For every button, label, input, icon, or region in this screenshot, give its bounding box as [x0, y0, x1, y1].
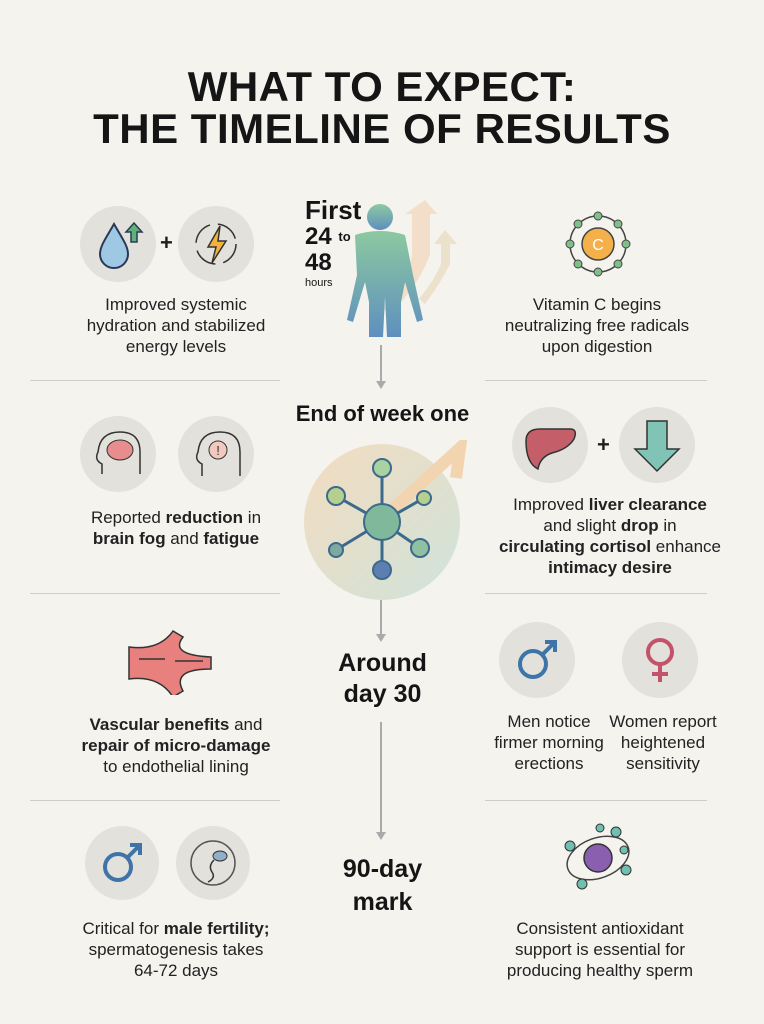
text: liver: Improved liver clearance — [513, 495, 707, 514]
heading: 90-day mark: 90-day — [343, 855, 422, 883]
text: antioxidant — [507, 919, 693, 980]
arrow 3 — [376, 722, 386, 840]
text: hydration: Improved systemic — [105, 295, 247, 314]
heading: first 24 to 48 hours: 48 — [305, 249, 332, 276]
text: liver: circulating cortisol enhance — [499, 537, 721, 556]
icon: energy — [178, 206, 254, 282]
arrow 2 — [376, 600, 386, 642]
text: men — [494, 712, 604, 773]
text: vascular: Vascular benefits and — [90, 715, 262, 734]
text: women — [609, 712, 717, 773]
text: vitamin C: neutralizing free radicals — [505, 316, 689, 335]
text: vitamin C: upon digestion — [542, 337, 652, 356]
text: brain fog: brain fog and fatigue — [93, 529, 259, 548]
icon: head alert — [178, 416, 254, 492]
icon: vitamin C: C — [592, 237, 604, 254]
text: fertility — [82, 919, 270, 980]
heading: 90-day mark — [343, 855, 422, 916]
text: vitamin C — [505, 295, 689, 356]
text: brain fog — [91, 508, 261, 548]
text: liver — [499, 495, 721, 577]
icon: down arrow — [619, 407, 695, 483]
icon: brain — [80, 416, 156, 492]
text: brain fog: Reported reduction in — [91, 508, 261, 527]
heading: first 24 to 48 hours: First — [305, 195, 361, 225]
icon: blood vessel — [128, 630, 212, 695]
text: liver: intimacy desire — [548, 558, 672, 577]
text: fertility: 64-72 days — [134, 961, 218, 980]
plus: + — [160, 230, 173, 255]
text: hydration — [87, 295, 265, 356]
icon: head alert: ! — [216, 443, 220, 458]
text: vitamin C: Vitamin C begins — [533, 295, 661, 314]
arrow 1 — [376, 345, 386, 389]
heading: around day 30 — [338, 649, 427, 708]
text: antioxidant: support is essential for — [515, 940, 685, 959]
text: women: sensitivity — [626, 754, 700, 773]
icon: water drop — [80, 206, 156, 282]
heading: first 24 to 48 hours: hours — [305, 277, 333, 289]
text: vascular — [82, 715, 270, 776]
text: men: firmer morning — [494, 733, 604, 752]
text: men: Men notice — [507, 712, 591, 731]
heading: end of week one: End of week one — [296, 401, 469, 426]
title: WHAT TO EXPECT: — [188, 63, 576, 110]
icon: human figure — [347, 200, 457, 337]
text: vascular: repair of micro-damage — [82, 736, 270, 755]
icon: male 2 — [85, 826, 159, 900]
heading: around day 30: Around — [338, 649, 427, 677]
text: women: Women report — [609, 712, 717, 731]
icon: vitamin C — [566, 212, 630, 276]
heading: first 24 to 48 hours: 24 to — [305, 223, 351, 250]
text: fertility: spermatogenesis takes — [89, 940, 263, 959]
text: hydration: hydration and stabilized — [87, 316, 265, 335]
plus: + — [597, 432, 610, 457]
icon: liver — [512, 407, 588, 483]
icon: antioxidant — [564, 824, 632, 890]
text: men: erections — [514, 754, 583, 773]
icon: molecule — [304, 440, 468, 600]
icon: sperm — [176, 826, 250, 900]
text: hydration: energy levels — [126, 337, 226, 356]
text: women: heightened — [621, 733, 705, 752]
heading: around day 30: day 30 — [344, 680, 421, 708]
heading: first 24 to 48 hours — [305, 195, 361, 289]
heading: 90-day mark: mark — [353, 888, 412, 916]
title: THE TIMELINE OF RESULTS — [93, 105, 671, 152]
text: vascular: to endothelial lining — [103, 757, 249, 776]
icon: male — [499, 622, 575, 698]
icon: female — [622, 622, 698, 698]
text: liver: and slight drop in — [543, 516, 677, 535]
text: antioxidant: producing healthy sperm — [507, 961, 693, 980]
text: antioxidant: Consistent antioxidant — [516, 919, 684, 938]
text: fertility: Critical for male fertility; — [82, 919, 270, 938]
title — [93, 63, 671, 152]
